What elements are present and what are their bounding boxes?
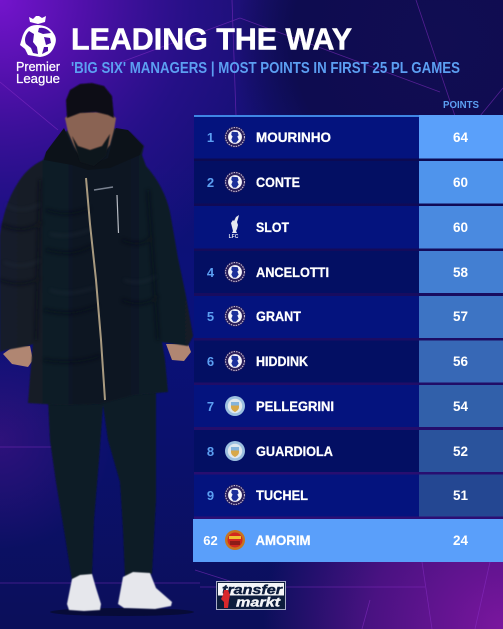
- row 10: Amorim highlight: [193, 519, 503, 562]
- row 9: 9: [207, 488, 214, 503]
- icon: Premier League lion: [20, 16, 56, 57]
- row 2: CONTE: [256, 175, 300, 190]
- hands: [3, 346, 33, 367]
- logo: transfermarkt: transfer: [222, 582, 283, 597]
- icon: Manchester United crest: [225, 530, 245, 550]
- row 3: [194, 206, 503, 248]
- row 1: MOURINHO: [256, 130, 331, 145]
- hood collar: [44, 128, 143, 170]
- row 7: [194, 385, 503, 427]
- row 7: 54: [453, 399, 468, 414]
- row 4: 4: [207, 265, 215, 280]
- row 6: HIDDINK: [256, 354, 308, 369]
- column header: POINTS: [443, 99, 479, 111]
- hair: [66, 83, 114, 118]
- wordmark: Premier: [16, 59, 61, 74]
- row 2: 60: [453, 175, 468, 190]
- manager figure: [0, 83, 194, 616]
- wordmark: [16, 59, 61, 86]
- row 5: GRANT: [256, 309, 302, 324]
- row 9: TUCHEL: [256, 488, 308, 503]
- row 8: 52: [453, 444, 468, 459]
- coat folds: [0, 180, 158, 362]
- row 6: 6: [207, 354, 214, 369]
- row 4: ANCELOTTI: [256, 265, 329, 280]
- row 3: SLOT: [256, 220, 290, 235]
- row 8: [194, 430, 503, 472]
- row 3: 60: [453, 220, 468, 235]
- row 7: 7: [207, 399, 214, 414]
- row 10: Amorim highlight: 62: [203, 533, 218, 548]
- row 5: [194, 296, 503, 338]
- logo: Premier League: [16, 16, 61, 86]
- logo: transfermarkt: markt: [236, 594, 281, 610]
- row 7: PELLEGRINI: [256, 399, 334, 414]
- row 6: [194, 340, 503, 382]
- zip: [86, 178, 105, 400]
- row 2: [194, 161, 503, 204]
- row 5: 5: [207, 309, 214, 324]
- wordmark: League: [16, 71, 60, 86]
- row 8: GUARDIOLA: [256, 444, 333, 459]
- legs: [48, 392, 156, 580]
- row 1: [194, 115, 503, 158]
- logo: transfermarkt: [216, 582, 286, 610]
- icon: Liverpool crest: [229, 215, 239, 240]
- row 4: [194, 251, 503, 293]
- row 9: 51: [453, 488, 468, 503]
- icon: Liverpool crest: LFC: [229, 234, 239, 240]
- row 4: 58: [453, 265, 468, 280]
- row 1: 64: [453, 130, 468, 145]
- row 8: 8: [207, 444, 214, 459]
- row 5: 57: [453, 309, 468, 324]
- icon: red player: [221, 590, 230, 608]
- row 10: Amorim highlight: AMORIM: [256, 533, 310, 548]
- face: [65, 112, 116, 160]
- row 9: [194, 474, 503, 516]
- row 2: 2: [207, 175, 214, 190]
- shadow: [50, 608, 194, 616]
- top rule: [194, 115, 503, 117]
- row 6: 56: [453, 354, 468, 369]
- table: [193, 99, 503, 562]
- title: LEADING THE WAY: [71, 22, 352, 56]
- row 10: Amorim highlight: 24: [453, 533, 468, 548]
- coat: [0, 128, 193, 405]
- table backing: [194, 115, 503, 519]
- shoes: [67, 574, 101, 611]
- row 1: 1: [207, 130, 214, 145]
